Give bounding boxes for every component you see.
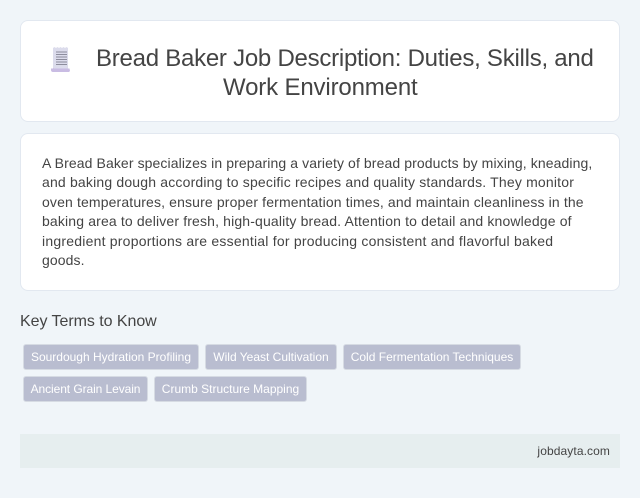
panel: description xyxy=(20,133,620,291)
footer text: jobdayta.com xyxy=(537,444,610,458)
text block: description: A Bread Baker specializes in preparing a variety of bread products by mixing, kneading, xyxy=(42,155,592,171)
tag xyxy=(23,344,199,370)
title: Work Environment xyxy=(223,74,418,101)
text block: description: oven temperatures, ensure proper fermentation times, and maintain cleanliness in the xyxy=(42,194,584,210)
footer bar xyxy=(20,434,620,468)
title: Bread Baker Job Description: Duties, Skills, and xyxy=(96,45,594,72)
heading: key terms: Key Terms to Know xyxy=(20,313,157,330)
text block: description: ingredient proportions are essential for producing consistent and flavorful baked xyxy=(42,233,553,249)
tag xyxy=(154,376,307,402)
tag: Sourdough Hydration Profiling xyxy=(31,350,191,364)
tag: Wild Yeast Cultivation xyxy=(213,350,329,364)
tag xyxy=(23,376,148,402)
tag: Ancient Grain Levain xyxy=(31,382,140,396)
text block: description xyxy=(42,155,592,268)
tag xyxy=(343,344,521,370)
tag: Cold Fermentation Techniques xyxy=(351,350,513,364)
panel: title card xyxy=(20,20,620,122)
icon: recipe scroll xyxy=(51,47,70,72)
text block: description: goods. xyxy=(42,252,85,268)
text block: description: and baking dough according to specific recipes and quality standards. They monitor xyxy=(42,174,574,190)
title xyxy=(96,45,594,101)
tag xyxy=(205,344,337,370)
text block: description: baking area to deliver fresh, high-quality bread. Attention to detail and knowledge of xyxy=(42,213,572,229)
tag: Crumb Structure Mapping xyxy=(162,382,299,396)
